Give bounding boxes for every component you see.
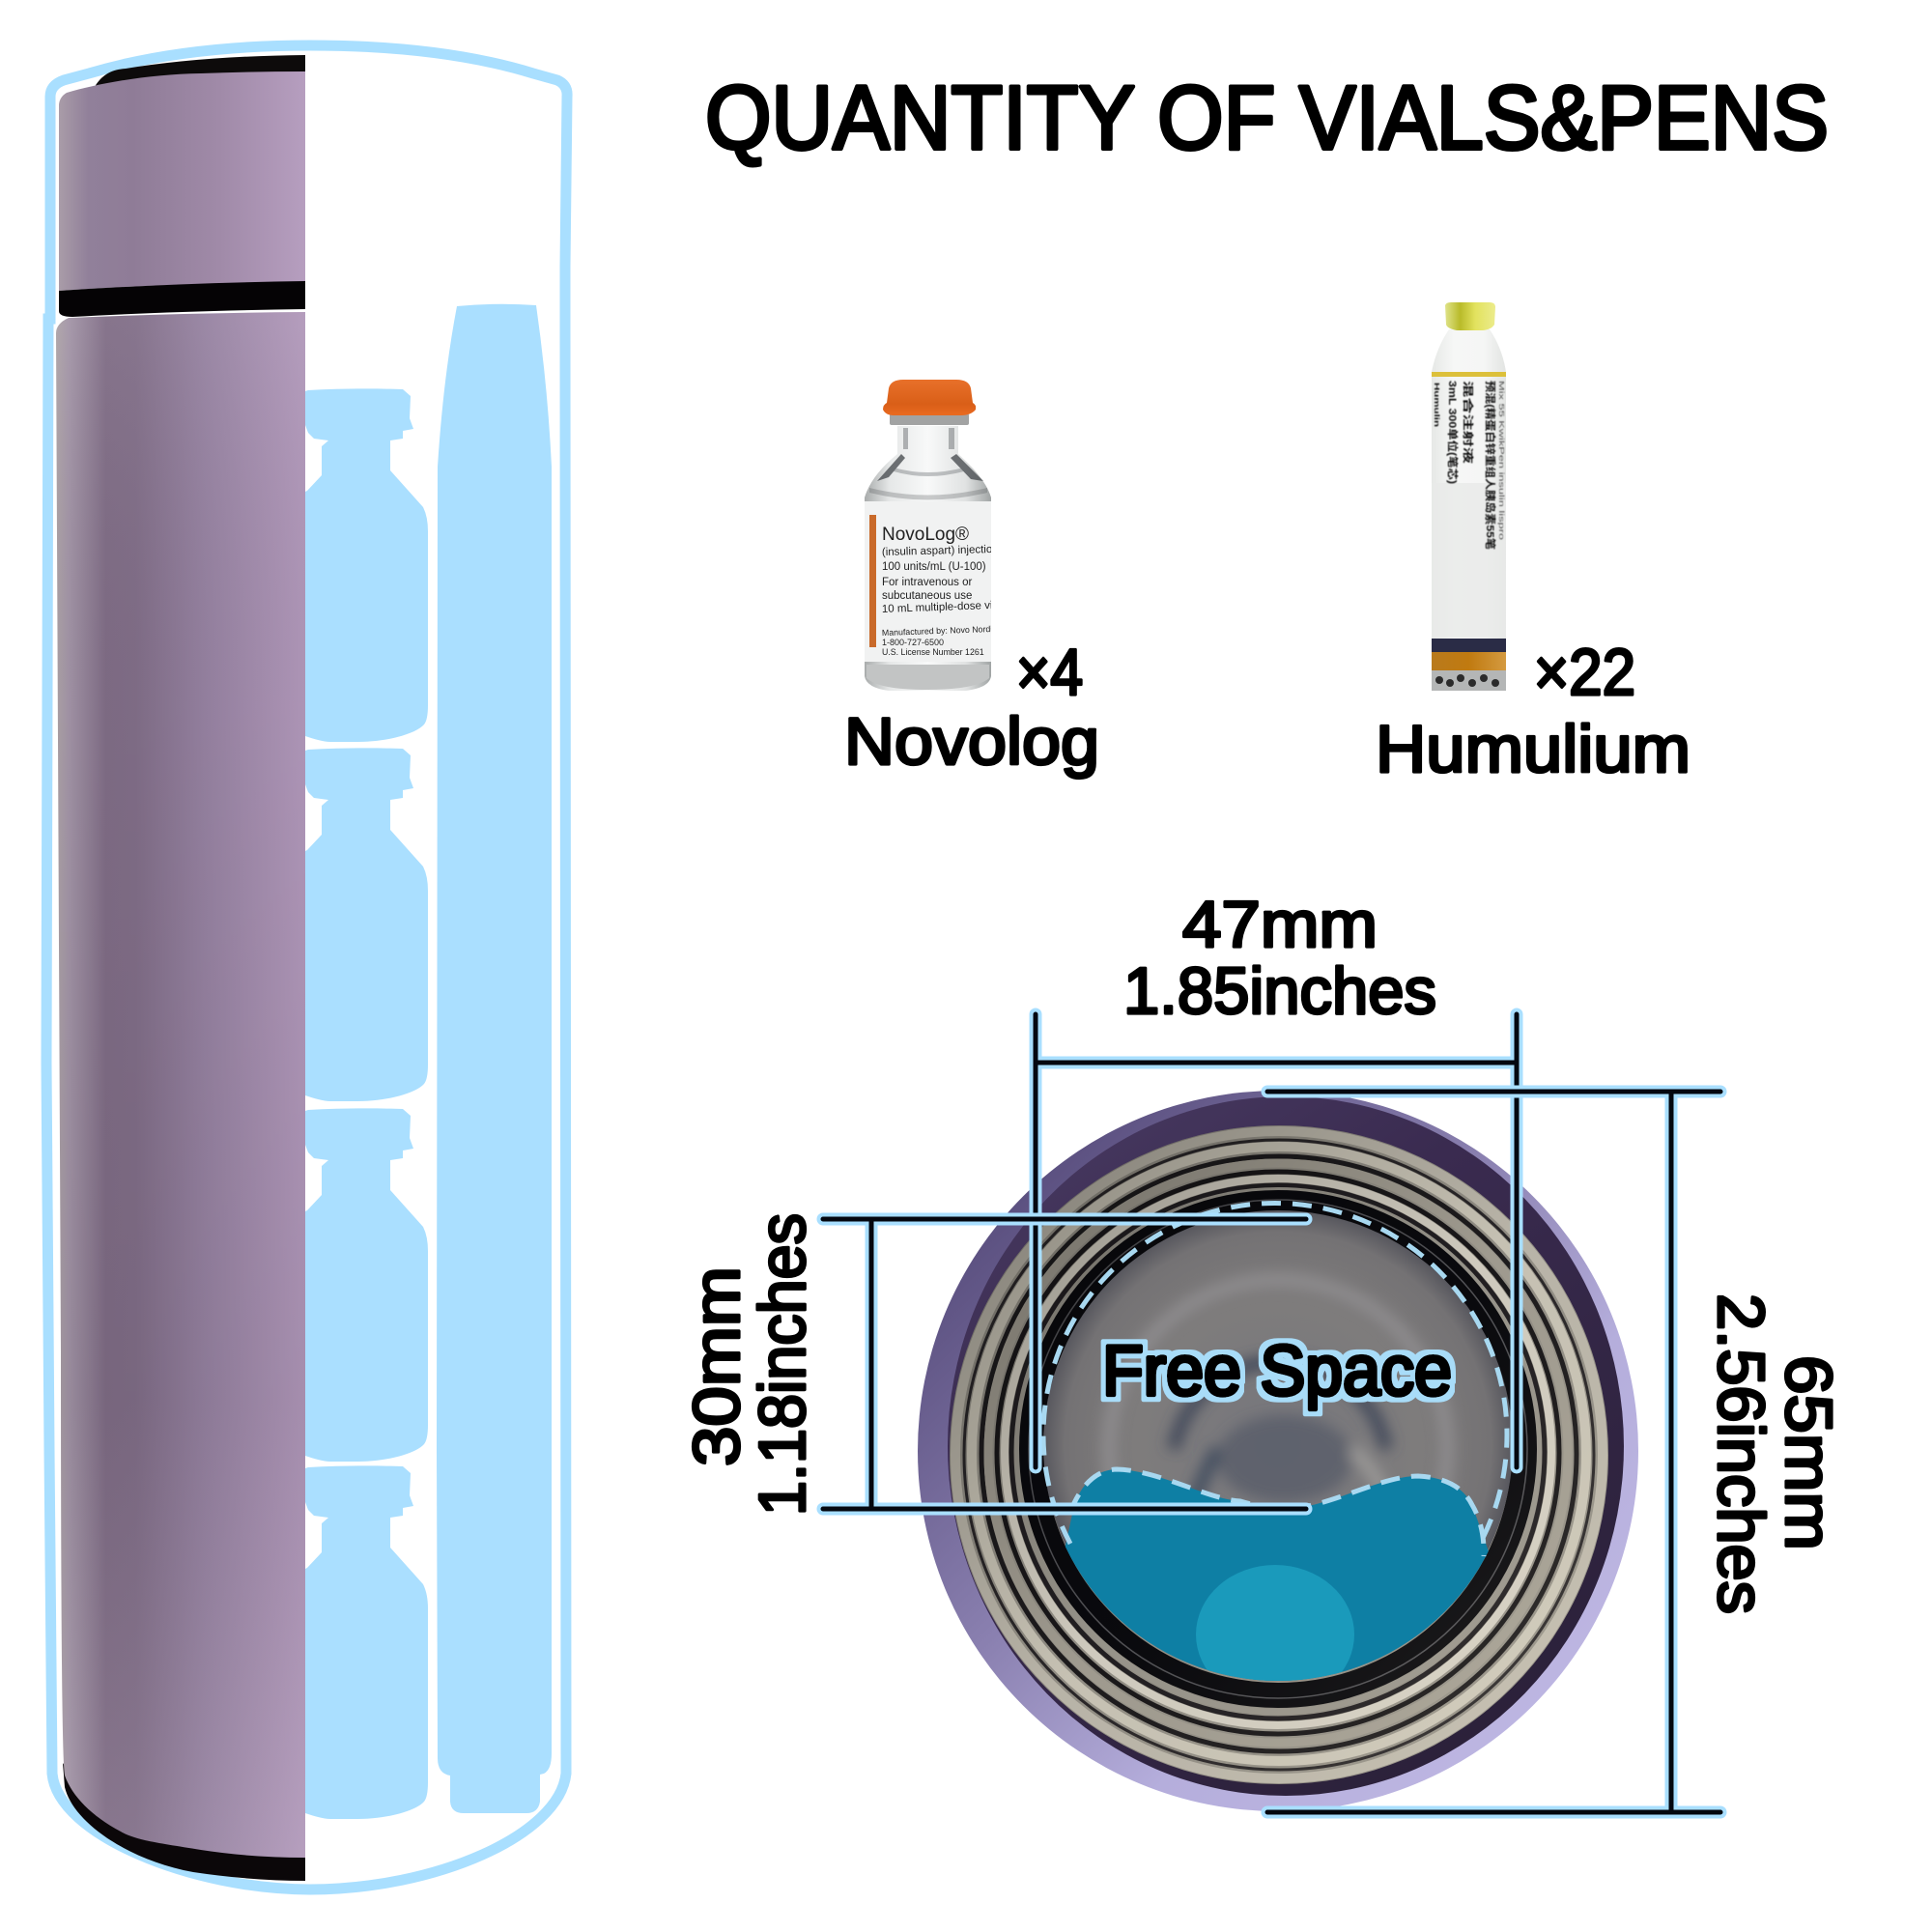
label: 47mm: 47mm: [1182, 888, 1378, 961]
bottle: upper black rim: [95, 55, 305, 92]
label: 65mm: 65mm: [1772, 1355, 1845, 1550]
text: pen label copy: 预混(精蛋白锌重组人胰岛素55笔: [1484, 381, 1497, 550]
label: pen count: ×22: [1534, 636, 1635, 709]
label: Novolog: Novolog: [844, 704, 1099, 779]
top view: steel rings: [950, 1125, 1608, 1784]
icon: vial orange cap: [883, 380, 976, 415]
text: pen label copy: Humulin: [1433, 383, 1439, 427]
top view: inner disc: [1043, 1210, 1513, 1680]
bottle: body shading: [56, 312, 305, 1858]
panel: top view of bottle opening: [918, 1091, 1638, 1811]
bottle: purple lid: [59, 71, 305, 291]
text: pen label copy: Mix 55 KwikPen insulin lispro: [1497, 381, 1504, 540]
icon: pen body: [1432, 329, 1506, 670]
top view: teal button: [1196, 1565, 1354, 1681]
top view: blurred concentric rings: [1100, 1271, 1457, 1503]
icon: pen dark band: [1432, 639, 1506, 652]
icon: pen orange band: [1432, 652, 1506, 670]
panel: Humulin pen: [1432, 302, 1506, 691]
text: vial label copy: [882, 526, 991, 655]
title: QUANTITY OF VIALS&PENS: [705, 67, 1829, 168]
icon: pen yellow cap: [1445, 302, 1495, 330]
panel: Novolog vial: [865, 380, 1002, 691]
icon: pen yellow line: [1432, 372, 1506, 377]
bottle: purple body: [56, 312, 305, 1858]
text: vial label copy: NovoLog®: [882, 525, 969, 545]
silhouette: vial 2: [305, 748, 428, 1101]
silhouette: vial 3: [305, 1108, 428, 1462]
silhouette: pen: [437, 304, 552, 1813]
label: 1.85inches: 1.85inches: [1123, 954, 1436, 1028]
text: vial label copy: 10 mL multiple-dose vial: [882, 600, 1002, 615]
text: pen label copy: 3mL 300单位(笔芯): [1446, 381, 1460, 484]
icon: vial neck and shoulder glass: [865, 426, 991, 691]
top view: free space dashed outline: [1043, 1204, 1507, 1544]
silhouette: vial 4: [305, 1465, 428, 1819]
text: vial label copy: For intravenous or: [882, 577, 972, 588]
label: 2.56inches: 2.56inches: [1704, 1293, 1777, 1614]
label: Humulium: Humulium: [1376, 712, 1690, 786]
panel: bottle cross-section outline: [46, 45, 567, 1889]
label: Free Space: Free Space: [1102, 1332, 1452, 1410]
top view: teal dashed outline: [1070, 1469, 1484, 1556]
text: vial label copy: 100 units/mL (U-100): [882, 561, 986, 573]
silhouette: vial 1: [305, 388, 428, 742]
icon: pen lower label fade: [1432, 483, 1506, 638]
top view: teal insert: [1065, 1470, 1489, 1681]
icon: vial base glass: [867, 665, 989, 690]
bottle: lower black rim: [63, 1763, 305, 1881]
dimension: 30mm: [823, 1219, 1306, 1509]
label: 1.18inches: 1.18inches: [746, 1213, 819, 1516]
text: vial label copy: U.S. License Number 1261: [882, 647, 984, 657]
dimension: width 47mm: [1036, 1014, 1517, 1467]
icon: vial shoulder reflections: [869, 428, 987, 500]
label: 30mm: 30mm: [680, 1266, 753, 1466]
icon: pen speckled base: [1432, 670, 1506, 691]
label: vial count: ×4: [1016, 636, 1083, 709]
dimension: height 65mm: [1267, 1092, 1720, 1812]
icon: vial grey crimp: [890, 413, 969, 425]
bottle: black gap band: [59, 281, 305, 317]
text: pen label copy: [1433, 381, 1504, 550]
text: vial label copy: subcutaneous use: [882, 590, 972, 602]
icon: vial label: [865, 501, 991, 662]
icon: vial orange label bar: [869, 515, 876, 647]
text: vial label copy: 1-800-727-6500: [882, 638, 944, 647]
text: vial label copy: Manufactured by: Novo Nordisk: [882, 624, 1002, 638]
top view: dark inner rim: [948, 1096, 1624, 1796]
outline: bottle contour: [46, 45, 567, 1889]
text: pen label copy: 混合注射液: [1462, 381, 1475, 464]
top view: lavender rim: [918, 1091, 1638, 1811]
text: vial label copy: (insulin aspart) injection: [882, 544, 999, 558]
